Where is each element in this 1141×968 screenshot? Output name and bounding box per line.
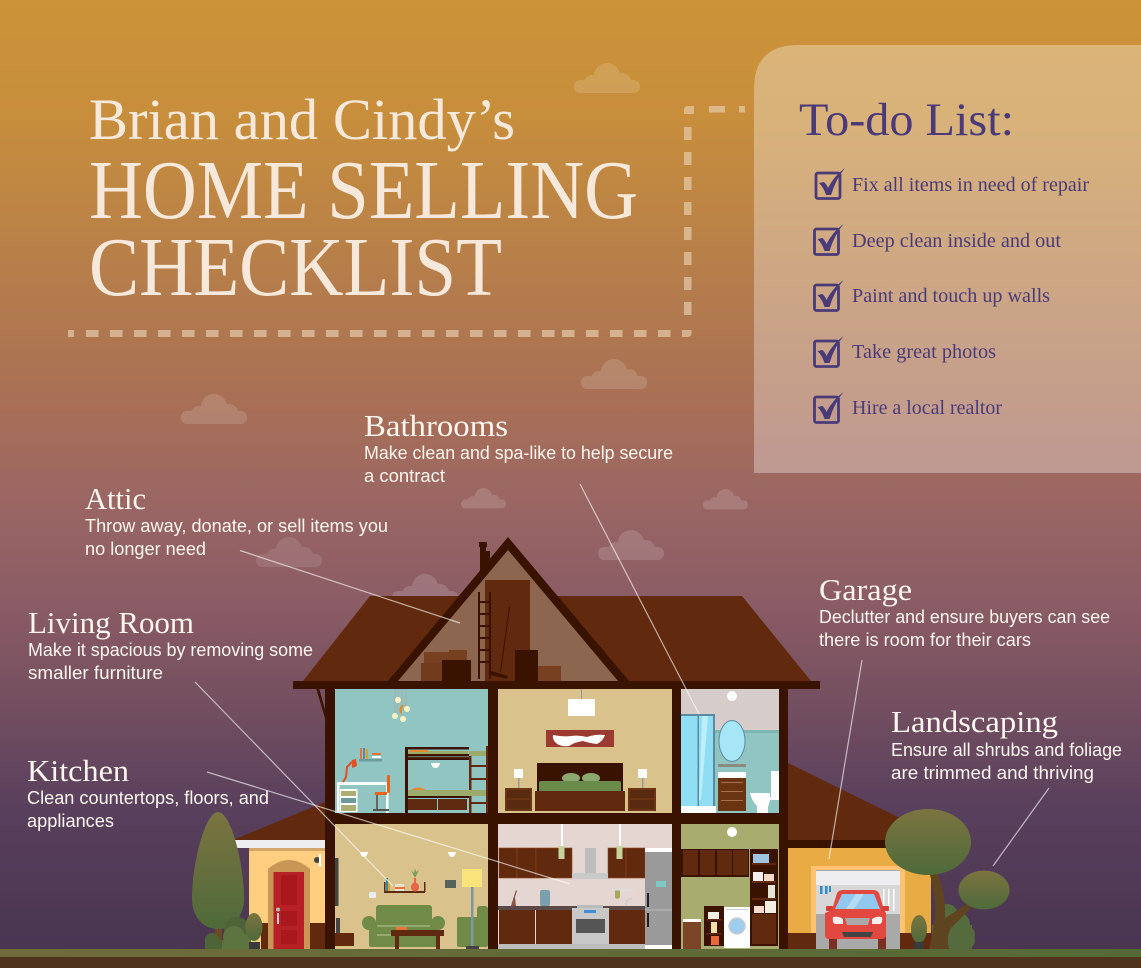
title line: CHECKLIST: CHECKLIST: [89, 221, 502, 314]
linen shelves: [750, 849, 778, 946]
painting: [546, 730, 614, 747]
cloud by roof right: [598, 530, 664, 560]
label: kitchen: Kitchen: [27, 753, 130, 788]
item: fix repairs: Fix all items in need of repair: [852, 174, 1089, 196]
item: deep clean: [814, 224, 1061, 254]
pendant light: [568, 699, 595, 716]
cloud by roof left: [256, 537, 322, 567]
dashed frame around title: [68, 106, 745, 337]
oven: [572, 905, 609, 944]
nightstands: [505, 769, 656, 811]
label: attic: Throw away, donate, or sell items you: [85, 516, 388, 536]
label: landscaping: Landscaping: [891, 704, 1058, 739]
cloud small centre: [461, 488, 506, 508]
toilet: [750, 771, 779, 813]
label: living room: [28, 605, 313, 683]
attic gable: [388, 537, 629, 681]
title line: Brian and Cindy's: Brian and Cindy’s: [89, 87, 515, 152]
room: laundry: [681, 824, 779, 949]
title line: HOME SELLING: HOME SELLING: [89, 144, 638, 237]
red car: [825, 890, 889, 949]
mirror: [719, 720, 745, 762]
fridge: [645, 848, 672, 949]
label: garage: there is room for their cars: [819, 630, 1031, 650]
small topiary right: [911, 915, 927, 949]
floor lamp: [462, 869, 482, 949]
right bush: [932, 904, 975, 949]
label: kitchen: [27, 753, 269, 831]
label: living room: Living Room: [28, 605, 194, 640]
front door: [274, 872, 304, 949]
room: bathroom: [681, 689, 779, 813]
item: photos: [814, 336, 996, 366]
bunk bed: [405, 746, 488, 813]
chimney: [479, 542, 490, 575]
range hood: [572, 848, 608, 879]
label: living room: smaller furniture: [28, 663, 163, 683]
frame beams: [293, 681, 820, 949]
room: main bedroom: [498, 689, 672, 813]
shower: [681, 714, 716, 813]
vanity: [718, 764, 746, 811]
coffee table: [391, 927, 444, 949]
left cypress tree: [192, 812, 244, 947]
leader lines: [195, 484, 1049, 886]
label: bathrooms: [364, 408, 673, 486]
desk lamp: [343, 761, 353, 782]
room: kids bedroom: [335, 689, 488, 813]
ground: [0, 949, 1141, 968]
room: living room: [335, 824, 488, 949]
left bushes: [205, 917, 251, 949]
garage interior: [816, 870, 900, 949]
washing machine: [724, 907, 750, 948]
label: kitchen: appliances: [27, 811, 114, 831]
tv console: [335, 918, 354, 946]
label: attic: [85, 481, 388, 559]
label: landscaping: Ensure all shrubs and foliage: [891, 740, 1122, 760]
item: paint walls: [814, 280, 1050, 310]
attic ladder: [478, 592, 491, 679]
right wing of house: [788, 763, 931, 949]
cloud middle right: [581, 359, 647, 389]
left wing of house: [233, 802, 325, 949]
item: photos: Take great photos: [852, 341, 996, 363]
item: realtor: [814, 392, 1002, 422]
cloud middle left: [181, 394, 247, 424]
lower cabinets: [499, 910, 645, 944]
cloud behind roof: [392, 574, 458, 604]
item: realtor: Hire a local realtor: [852, 397, 1002, 419]
cloud top: [574, 63, 640, 93]
counter: [498, 906, 645, 910]
broom: [491, 607, 510, 679]
small topiary left: [246, 913, 262, 949]
bookshelf: [359, 748, 382, 762]
right tree: [885, 809, 1010, 949]
room: kitchen: [498, 824, 672, 949]
label: garage: [819, 572, 1110, 650]
roof: [303, 596, 811, 681]
chair: [373, 775, 390, 811]
panel: to-do list: [754, 45, 1141, 473]
sofa: [362, 905, 445, 947]
to-do heading: To-do List:: [799, 94, 1014, 146]
label: landscaping: are trimmed and thriving: [891, 763, 1094, 783]
label: living room: Make it spacious by removing some: [28, 640, 313, 660]
counter items: [511, 889, 634, 906]
label: bathrooms: Make clean and spa-like to help secure: [364, 443, 673, 463]
title: [89, 87, 638, 314]
cloud small right: [703, 489, 748, 509]
item: paint walls: Paint and touch up walls: [852, 285, 1050, 307]
upper cabinets: [499, 848, 645, 878]
attic boxes: [421, 650, 561, 681]
label: attic: no longer need: [85, 539, 206, 559]
label: kitchen: Clean countertops, floors, and: [27, 788, 269, 808]
label: garage: Declutter and ensure buyers can see: [819, 607, 1110, 627]
house main structure: [293, 537, 820, 949]
item: deep clean: Deep clean inside and out: [852, 230, 1061, 252]
small shelf: [704, 906, 724, 946]
armchair: [457, 906, 488, 947]
wall shelf: [384, 868, 426, 893]
label: bathrooms: Bathrooms: [364, 408, 508, 443]
label: bathrooms: a contract: [364, 466, 445, 486]
label: garage: Garage: [819, 572, 912, 607]
item: fix repairs: [816, 168, 1089, 198]
basket: [683, 919, 701, 949]
bed: [535, 763, 625, 811]
desk: [337, 782, 389, 813]
label: attic: Attic: [85, 481, 146, 516]
label: landscaping: [891, 704, 1122, 783]
laundry cabinets: [681, 849, 749, 877]
